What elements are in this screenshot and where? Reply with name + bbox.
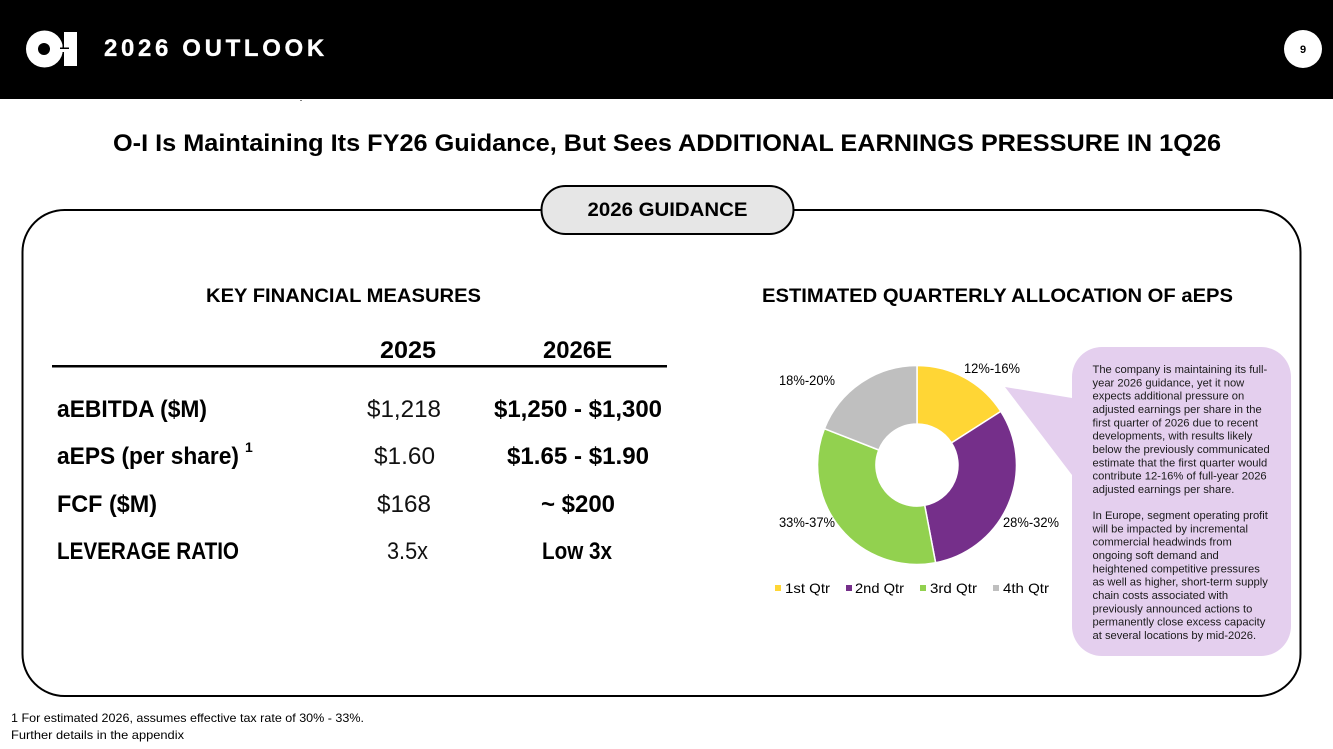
callout: commentary: previously announced actions to [1092,603,1252,615]
callout: commentary: permanently close excess capacity [1092,617,1266,629]
panel tab: 2026 guidance: 2026 GUIDANCE [588,200,748,221]
panel: 2026 guidance [22,186,1300,696]
donut data labels: 33%-37% [779,514,835,530]
header band [0,0,1333,101]
callout: commentary: adjusted earnings per share. [1092,484,1234,496]
table header 2025: 2025 [380,337,436,364]
callout: commentary: chain costs associated with [1092,590,1228,602]
donut chart [818,366,1016,564]
footnote: Further details in the appendix [11,728,184,742]
chart legend [775,580,1049,596]
heading: key financial measures: KEY FINANCIAL MEASURES [206,286,481,307]
chart legend: 1st Qtr [785,580,830,596]
donut data labels [779,360,1059,530]
page number badge: 9 [1300,44,1306,56]
row: aEBITDA: $1,250 - $1,300 [494,396,662,423]
donut data labels: 18%-20% [779,372,835,388]
row: leverage ratio [57,538,613,565]
callout: commentary: expects additional pressure on [1092,390,1244,402]
row: aEPS: aEPS (per share) [57,443,239,470]
callout: commentary: ongoing soft demand and [1092,550,1219,562]
header title: 2026 OUTLOOK [104,35,328,62]
row: leverage ratio: LEVERAGE RATIO [57,538,239,565]
callout: commentary: commercial headwinds from [1092,537,1232,549]
callout: commentary: first quarter of 2026 due to recent [1092,417,1259,429]
row: leverage ratio: 3.5x [387,538,428,565]
slice: 3rd quarter [818,429,936,564]
heading: estimated quarterly allocation: ESTIMATED QUARTERLY ALLOCATION OF aEPS [762,286,1233,307]
page number badge [1284,30,1322,68]
slide headline: O-I Is Maintaining Its FY26 Guidance, But Sees ADDITIONAL EARNINGS PRESSURE IN 1Q26 [113,130,1221,157]
callout: commentary: year 2026 guidance, yet it now [1092,377,1245,389]
table header 2026E: 2026E [543,337,612,364]
table: key financial measures [52,337,667,565]
callout: commentary [1005,347,1291,656]
row: aEPS [57,439,649,470]
row: aEPS: $1.65 - $1.90 [507,443,649,470]
callout: commentary: adjusted earnings per share in the [1092,404,1262,416]
row: leverage ratio: Low 3x [542,538,613,565]
footnote [11,711,364,742]
row: aEBITDA: $1,218 [367,396,441,423]
slice: 4th quarter [824,366,917,450]
callout: commentary: The company is maintaining its full- [1092,364,1267,376]
chart legend: 4th Qtr [1003,580,1049,596]
callout: commentary: at several locations by mid-2026. [1092,630,1256,642]
slice: 1st quarter [917,366,1001,443]
row: FCF: ~ $200 [541,491,615,518]
row: aEPS: $1.60 [374,443,435,470]
footnote: 1 For estimated 2026, assumes effective tax rate of 30% - 33%. [11,711,364,725]
panel tab: 2026 guidance [542,186,794,234]
row: FCF: FCF ($M) [57,491,157,518]
chart legend: 2nd Qtr [855,580,904,596]
donut data labels: 28%-32% [1003,514,1059,530]
callout: commentary: as well as higher, short-term supply [1092,577,1268,589]
chart legend: 3rd Qtr [930,580,977,596]
callout: commentary: heightened competitive pressures [1092,563,1260,575]
callout: commentary: will be impacted by incremental [1092,523,1248,535]
callout: commentary: In Europe, segment operating profit [1092,510,1269,522]
callout: commentary: developments, with results likely [1092,430,1253,442]
row: aEBITDA: aEBITDA ($M) [57,396,207,423]
slice: 2nd quarter [925,411,1016,563]
callout: commentary: contribute 12-16% of full-year 2026 [1092,470,1267,482]
logo: O-I [26,28,77,70]
row: FCF [57,491,615,518]
row: FCF: $168 [377,491,431,518]
donut data labels: 12%-16% [964,360,1020,376]
callout: commentary: estimate that the first quarter would [1092,457,1267,469]
callout: commentary: below the previously communicated [1092,444,1270,456]
row: aEPS: 1 [245,439,253,455]
row: aEBITDA [57,396,662,423]
